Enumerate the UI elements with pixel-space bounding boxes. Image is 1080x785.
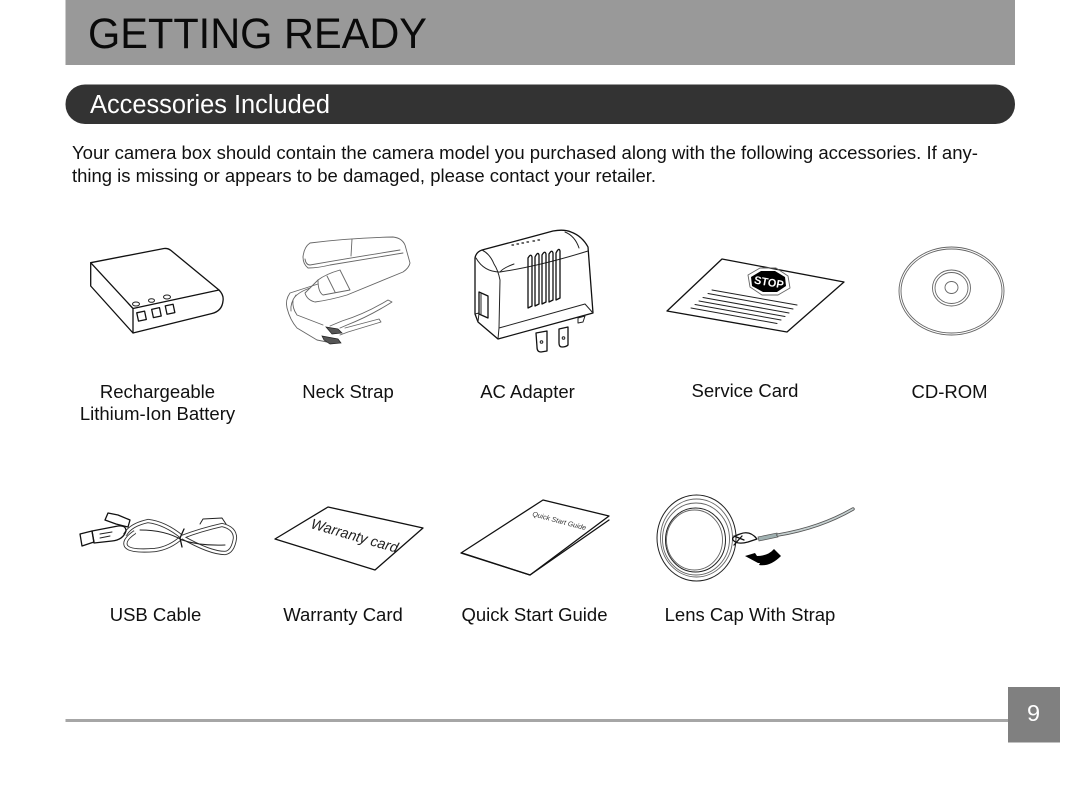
intro paragraph: thing is missing or appears to be damaged, please contact your retailer. [72,165,656,186]
icon: warranty card [275,507,423,570]
caption: Warranty Card: Warranty Card [283,604,403,625]
page number [1008,687,1060,742]
section heading bar [66,84,1015,124]
icon: service card: STOP [753,274,785,291]
title banner [66,0,1015,65]
intro paragraph: Your camera box should contain the camera model you purchased along with the following accessories. If any- [72,142,978,163]
icon: quick start guide [461,500,609,575]
caption: CD-ROM: CD-ROM [911,381,988,402]
icon: lens cap with strap [657,495,853,581]
caption: Service Card: Service Card [692,380,798,401]
icon: quick start guide: Quick Start Guide [531,511,587,532]
intro paragraph [72,142,978,186]
caption: Lens Cap With Strap: Lens Cap With Strap [665,604,835,625]
icon: neck strap [286,237,410,344]
caption: Rechargeable Lithium-Ion Battery [80,381,236,424]
icon: warranty card: Warranty card [309,516,401,557]
section heading bar: Accessories Included [90,91,330,119]
icon: battery [91,248,223,333]
icon: USB cable [80,513,235,553]
caption: Rechargeable Lithium-Ion Battery: Lithium-Ion Battery [80,403,236,424]
icon: AC adapter [475,230,593,352]
title banner: GETTING READY [88,11,427,58]
caption: Quick Start Guide: Quick Start Guide [461,604,608,625]
caption: AC Adapter: AC Adapter [480,381,575,402]
caption: Rechargeable Lithium-Ion Battery: Rechargeable [100,381,215,402]
caption: USB Cable: USB Cable [110,604,201,625]
footer rule [66,719,1008,722]
icon: CD-ROM [899,247,1004,335]
caption: Neck Strap: Neck Strap [302,381,394,402]
icon: service card [667,259,844,332]
page number: 9 [1027,700,1040,726]
